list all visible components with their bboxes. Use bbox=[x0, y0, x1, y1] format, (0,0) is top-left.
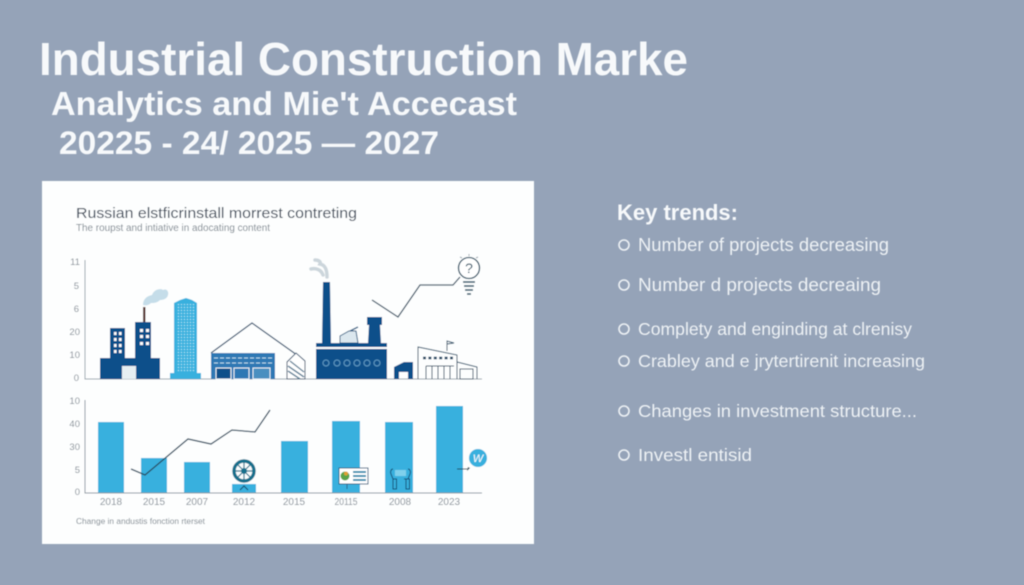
icon: small navy house bbox=[394, 362, 413, 379]
icon: warehouse bbox=[211, 323, 305, 379]
trend item 4: Crabley and e jrytertirenit increasing bbox=[638, 351, 925, 371]
trend item 3: Complety and enginding at clrenisy bbox=[638, 319, 912, 339]
trend item 1: Number of projects decreasing bbox=[638, 235, 889, 255]
x axis labels: 20115 bbox=[334, 497, 358, 508]
y axis labels: 5 bbox=[75, 465, 80, 476]
subtitle: Analytics and Mie't Accecast bbox=[51, 86, 517, 123]
panel heading: Russian elstficrinstall morrest contreting bbox=[76, 206, 357, 222]
bar chart bbox=[69, 396, 482, 508]
top chart: axis: 5 bbox=[74, 281, 79, 292]
icon: W badge with arrow: W bbox=[473, 453, 485, 465]
panel: key trends bbox=[617, 200, 925, 465]
x axis labels: 2023 bbox=[438, 497, 461, 508]
icon: large factory with chimneys bbox=[311, 260, 387, 379]
trend item 5: Changes in investment structure... bbox=[638, 401, 917, 421]
x axis labels: 2015 bbox=[283, 497, 306, 508]
x axis labels: 2007 bbox=[186, 497, 209, 508]
top chart: axis bbox=[69, 257, 482, 384]
top chart: axis: 10 bbox=[69, 350, 80, 361]
y axis labels: 10 bbox=[69, 396, 80, 407]
icon: tool pair bbox=[391, 469, 410, 489]
icon: cyan tower bbox=[170, 298, 201, 379]
icon: navy factory with smoke bbox=[100, 289, 168, 379]
chart footnote: Change in andustis fonction rterset bbox=[76, 516, 206, 526]
main title: Industrial Construction Marke bbox=[39, 33, 688, 85]
icon: light bulb with question mark bbox=[458, 254, 480, 294]
icon: gear wheel bbox=[234, 461, 254, 490]
x axis labels: 2018 bbox=[100, 497, 123, 508]
icon: light bulb with question mark: ? bbox=[465, 260, 473, 276]
bars bbox=[98, 406, 463, 493]
trend line bbox=[131, 410, 270, 475]
x axis labels: 2015 bbox=[143, 497, 166, 508]
top chart: axis: 20 bbox=[69, 327, 80, 338]
top chart: axis: 6 bbox=[74, 304, 79, 315]
y axis labels: 0 bbox=[75, 487, 80, 498]
trend item 2: Number d projects decreaing bbox=[638, 275, 881, 295]
top chart: trend line bbox=[372, 277, 460, 317]
date range: 20225 - 24/ 2025 — 2027 bbox=[59, 125, 439, 161]
top chart: axis: 11 bbox=[70, 257, 80, 268]
y axis labels: 30 bbox=[69, 442, 80, 453]
top chart: axis: 0 bbox=[74, 373, 79, 384]
icon: W badge with arrow bbox=[457, 449, 487, 471]
title block bbox=[39, 33, 688, 161]
key trends heading: Key trends: bbox=[617, 200, 738, 225]
x axis labels bbox=[100, 497, 461, 508]
x axis labels: 2008 bbox=[389, 497, 412, 508]
x axis labels: 2012 bbox=[233, 497, 256, 508]
panel subheading: The roupst and intiative in adocating content bbox=[76, 223, 270, 234]
panel: charts bbox=[42, 181, 534, 544]
icon: presentation board bbox=[339, 468, 368, 489]
trend item 6: Investl entisid bbox=[638, 445, 752, 465]
icon: outlined building bbox=[418, 341, 477, 379]
y axis labels bbox=[69, 396, 80, 498]
y axis labels: 40 bbox=[69, 419, 80, 430]
